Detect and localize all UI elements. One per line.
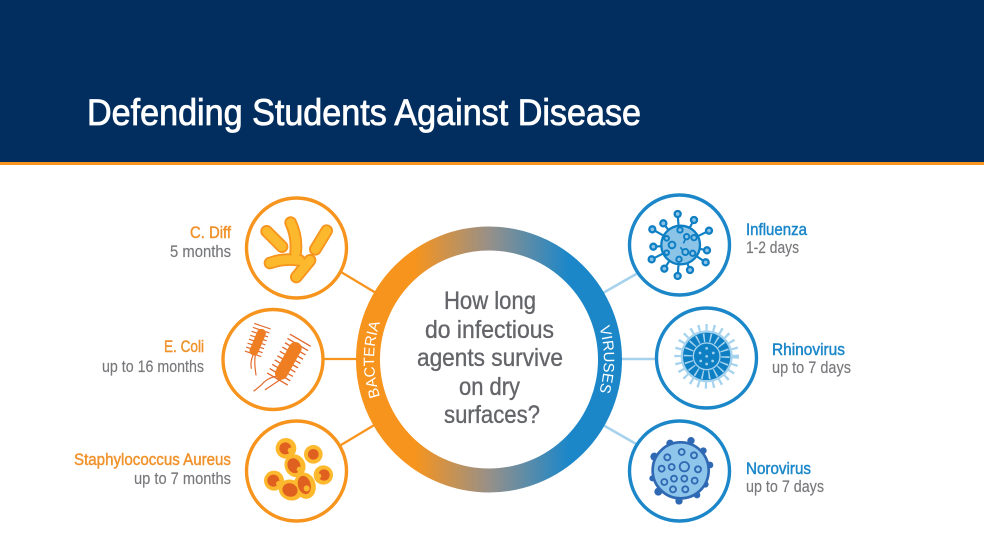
central question: do infectious xyxy=(425,316,554,344)
duration: up to 7 days: up to 7 days xyxy=(772,359,851,377)
connector lines: viruses xyxy=(603,273,656,445)
icon: norovirus xyxy=(630,421,730,521)
label: Rhinovirus: Rhinovirus xyxy=(772,341,845,359)
panel: Rhinovirus xyxy=(656,308,851,408)
header band xyxy=(0,0,984,165)
title: Defending Students Against Disease xyxy=(87,92,641,133)
central question: surfaces? xyxy=(444,401,540,429)
duration: up to 7 months: up to 7 months xyxy=(134,470,231,488)
panel: Staphylococcus Aureus xyxy=(74,421,346,521)
label: Norovirus: Norovirus xyxy=(746,460,811,478)
label: Staphylococcus Aureus: Staphylococcus Aureus xyxy=(74,451,231,469)
duration: 5 months: 5 months xyxy=(170,243,231,261)
icon: Staphylococcus bacteria xyxy=(246,421,346,521)
icon: C. Diff bacteria xyxy=(246,198,346,298)
central question: How long xyxy=(444,287,536,315)
central question: on dry xyxy=(459,373,520,401)
connector lines: bacteria xyxy=(323,272,376,445)
label: Influenza: Influenza xyxy=(746,221,808,239)
label: C. Diff: C. Diff xyxy=(190,224,231,242)
icon: rhinovirus xyxy=(656,308,756,408)
panel: Influenza xyxy=(630,195,808,295)
ring label: viruses: VIRUSES xyxy=(600,324,614,394)
panel: C. Diff xyxy=(170,198,346,298)
central ring xyxy=(368,238,610,480)
panel: E. Coli xyxy=(102,310,323,410)
duration: up to 7 days: up to 7 days xyxy=(746,478,824,496)
panel: Norovirus xyxy=(630,421,824,521)
central question: agents survive xyxy=(417,344,563,372)
central question xyxy=(417,287,563,429)
duration: 1-2 days: 1-2 days xyxy=(746,239,799,257)
ring label: bacteria: BACTERIA xyxy=(364,322,380,398)
label: E. Coli: E. Coli xyxy=(164,338,204,356)
icon: influenza virus xyxy=(630,195,730,295)
duration: up to 16 months: up to 16 months xyxy=(102,358,204,376)
icon: E. Coli bacteria xyxy=(223,310,323,410)
